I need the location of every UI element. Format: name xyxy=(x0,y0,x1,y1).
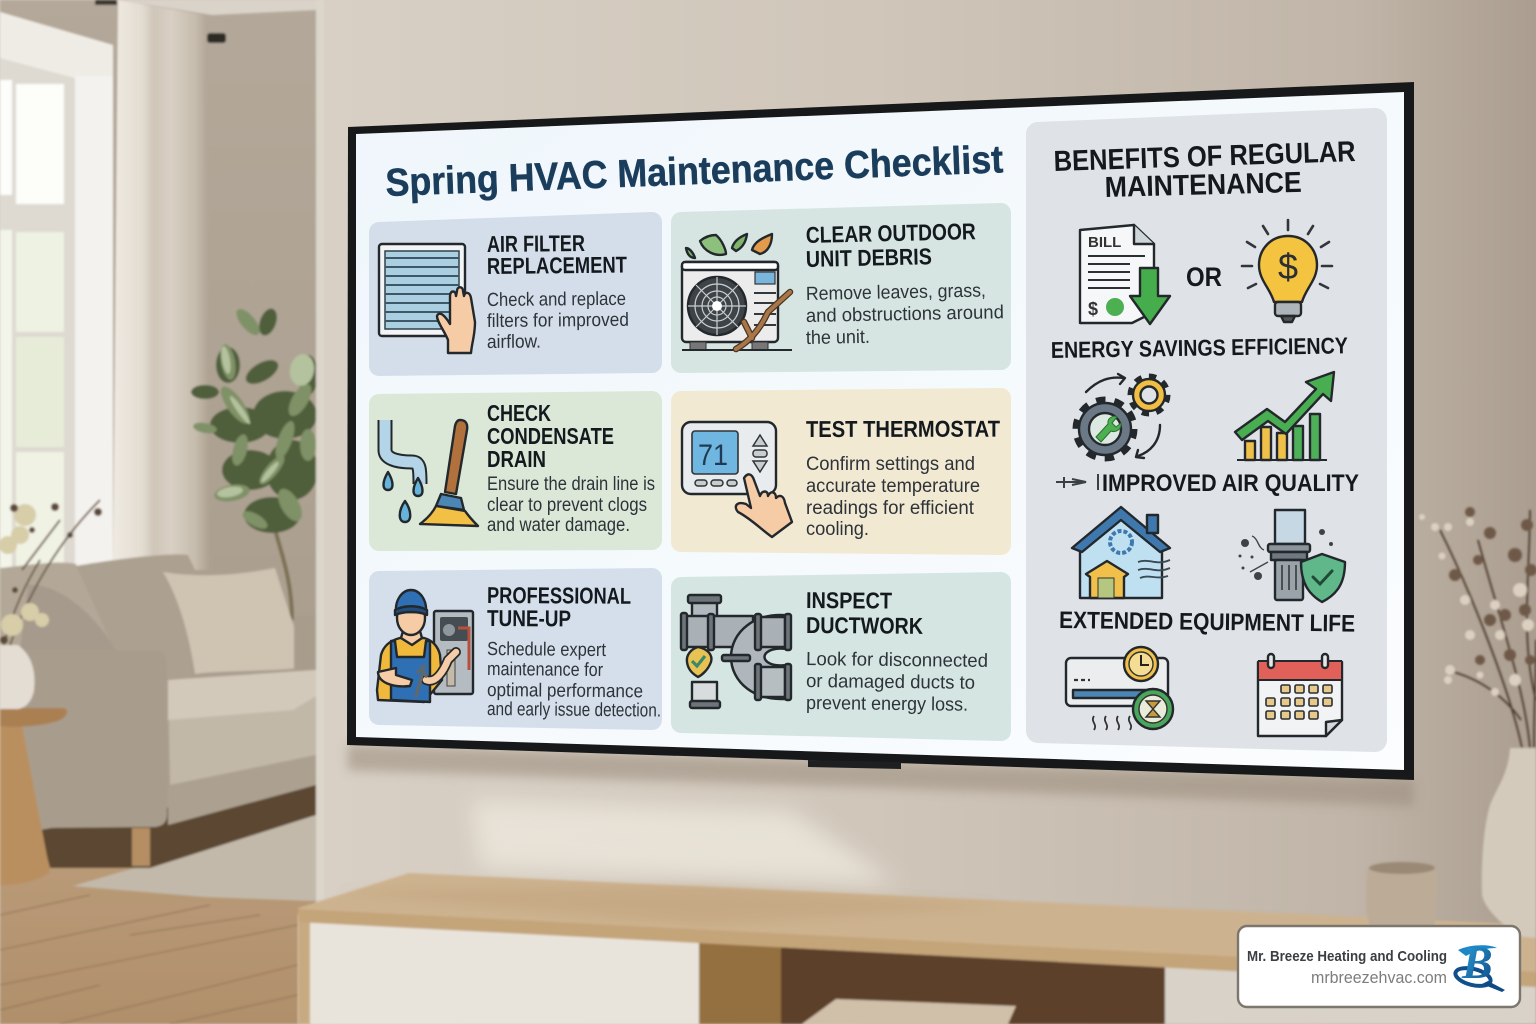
body text: Look for disconnected xyxy=(806,649,988,672)
window pane top xyxy=(0,80,64,204)
body text xyxy=(487,639,661,722)
icon: technician xyxy=(377,590,473,702)
body text: optimal performance xyxy=(487,680,643,702)
icon: lightbulb with dollar sign xyxy=(1242,220,1332,322)
body text: Remove leaves, grass, xyxy=(806,281,986,305)
body text xyxy=(487,474,655,536)
body text xyxy=(487,289,629,353)
icon: outdoor unit, leaves and branch xyxy=(682,234,792,350)
body text: airflow. xyxy=(487,332,541,353)
icon: growth bar chart xyxy=(1235,372,1334,460)
heading: REPLACEMENT xyxy=(487,252,627,279)
panel: check condensate drain xyxy=(379,400,655,541)
body text: cooling. xyxy=(806,519,869,540)
seat top xyxy=(168,670,316,720)
icon: ductwork with check badge xyxy=(681,595,791,708)
card background xyxy=(681,398,1001,545)
cream pillow xyxy=(163,568,308,674)
sofa leg xyxy=(132,828,150,866)
icon: bill with down arrow: $ xyxy=(1088,299,1098,319)
console top xyxy=(298,873,1536,972)
wall edge highlight xyxy=(316,0,324,900)
icon: bill with down arrow xyxy=(1080,225,1170,324)
icon: house with snowflake and air xyxy=(1072,507,1170,598)
heading: TUNE-UP xyxy=(487,605,571,631)
website: mrbreezehvac.com xyxy=(1311,968,1447,987)
panel: inspect ductwork xyxy=(681,582,1001,731)
card background xyxy=(379,401,652,541)
wall: main feature wall xyxy=(316,0,1536,1024)
heading xyxy=(487,400,614,472)
body text: and obstructions around xyxy=(806,302,1004,327)
drawer left xyxy=(310,923,699,1024)
or label: OR xyxy=(1186,262,1222,292)
heading xyxy=(487,230,627,279)
icon: bill with down arrow: BILL xyxy=(1088,234,1121,251)
right arm xyxy=(294,615,318,673)
floor xyxy=(0,800,316,1024)
console top shading xyxy=(340,886,1000,925)
icon: calendar xyxy=(1258,654,1342,736)
side table xyxy=(0,708,67,885)
window trim xyxy=(0,12,113,570)
tv frame xyxy=(347,82,1414,780)
screen xyxy=(356,92,1404,770)
body text: and water damage. xyxy=(487,515,630,536)
panel background xyxy=(1038,120,1375,740)
heading: DRAIN xyxy=(487,446,546,472)
label: extended equipment life: EXTENDED EQUIPMENT LIFE xyxy=(1059,607,1355,638)
body text: or damaged ducts to xyxy=(806,671,975,694)
back cushion centre xyxy=(76,554,195,680)
back cushion left xyxy=(0,563,115,660)
dried branches xyxy=(1419,507,1536,748)
curtain rod xyxy=(207,33,226,43)
heading: INSPECT xyxy=(806,587,892,614)
tv bottom nub xyxy=(808,760,901,769)
floor plank lines xyxy=(0,895,298,1024)
brand card: Mr. Breeze Heating and Cooling xyxy=(1238,926,1520,1007)
panel: clear outdoor unit debris xyxy=(681,213,1004,363)
tv: frame and screen xyxy=(347,82,1414,780)
wall shadow under tv xyxy=(348,745,1414,806)
icon: air conditioner with clock and hourglass xyxy=(1066,647,1173,730)
icon: thermostat and hand xyxy=(682,422,792,537)
body text: and early issue detection. xyxy=(487,699,661,722)
seat xyxy=(168,670,316,785)
heading xyxy=(487,582,631,631)
label: energy savings efficiency: ENERGY SAVINGS EFFICIENCY xyxy=(1051,332,1348,363)
cup xyxy=(1366,862,1437,926)
body text: Confirm settings and xyxy=(806,454,975,475)
icon: air filter with shield xyxy=(1238,510,1345,602)
card background xyxy=(681,582,1001,731)
vase with flowers xyxy=(0,500,102,709)
window frame xyxy=(0,58,75,570)
title: Spring HVAC Maintenance Checklist xyxy=(385,138,1004,205)
drawer right xyxy=(1165,967,1536,1024)
wall: left side room xyxy=(0,0,318,840)
heading: CLEAR OUTDOOR xyxy=(806,218,976,248)
body text: clear to prevent clogs xyxy=(487,495,647,516)
ceiling xyxy=(118,0,316,15)
heading xyxy=(806,587,923,639)
body text: accurate temperature xyxy=(806,476,980,497)
icon: logo: B xyxy=(1461,937,1493,988)
heading: TEST THERMOSTAT xyxy=(806,416,1000,442)
heading: CHECK xyxy=(487,400,551,426)
icon: gears with wrench xyxy=(1077,374,1167,458)
body text: Ensure the drain line is xyxy=(487,474,655,495)
card background xyxy=(1238,926,1520,1007)
body text: Schedule expert xyxy=(487,639,607,661)
drawer left frame xyxy=(298,920,310,1024)
label: improved air quality: IMPROVED AIR QUALITY xyxy=(1102,470,1359,497)
body text: prevent energy loss. xyxy=(806,693,968,716)
media console xyxy=(298,507,1536,1024)
body text xyxy=(806,454,980,540)
console niche xyxy=(699,943,1165,1024)
body text xyxy=(806,281,1004,349)
icon: air filter and hand xyxy=(379,244,475,353)
plant xyxy=(191,305,318,620)
niche post xyxy=(699,940,781,1024)
body text: maintenance for xyxy=(487,659,604,681)
sofa shadow xyxy=(40,782,316,868)
panel: test thermostat xyxy=(681,398,1001,545)
rug xyxy=(73,815,316,901)
window sill reveal xyxy=(75,76,113,570)
sofa xyxy=(0,554,318,868)
card background xyxy=(379,222,652,366)
body text: filters for improved xyxy=(487,310,629,332)
heading: UNIT DEBRIS xyxy=(806,243,932,272)
panel heading: BENEFITS OF REGULAR xyxy=(1053,136,1356,178)
heading: DUCTWORK xyxy=(806,612,923,639)
box in niche xyxy=(802,999,1016,1024)
icon: logo xyxy=(1454,937,1505,992)
company name: Mr. Breeze Heating and Cooling xyxy=(1247,948,1447,965)
panel: professional tune-up xyxy=(377,578,661,722)
panel heading: MAINTENANCE xyxy=(1104,167,1302,204)
window pane bottom xyxy=(0,230,64,570)
icon: lightbulb with dollar sign: $ xyxy=(1278,246,1298,287)
curtain xyxy=(113,0,210,570)
back pillow xyxy=(20,585,115,650)
curtain rod left xyxy=(95,0,117,5)
card background xyxy=(681,213,1001,363)
console front edge xyxy=(298,909,1536,987)
body text: the unit. xyxy=(806,327,870,349)
icon: thermostat and hand: 71 xyxy=(698,439,728,472)
icon: drain pipe, water drops and broom xyxy=(384,420,478,526)
body text: Check and replace xyxy=(487,289,626,311)
panel: benefits of regular maintenance xyxy=(1038,120,1375,740)
heading: CONDENSATE xyxy=(487,423,614,449)
glitch mark beside label xyxy=(1056,474,1098,490)
body text xyxy=(806,649,988,716)
heading: AIR FILTER xyxy=(487,230,585,257)
sofa base xyxy=(168,755,316,825)
left arm xyxy=(20,650,167,828)
vase xyxy=(1482,748,1536,938)
heading: PROFESSIONAL xyxy=(487,582,631,609)
wall light patch xyxy=(470,800,900,885)
card background xyxy=(379,578,652,720)
panel: air filter replacement xyxy=(379,222,652,366)
panel heading xyxy=(1053,136,1356,204)
body text: readings for efficient xyxy=(806,498,975,519)
heading xyxy=(806,218,976,272)
